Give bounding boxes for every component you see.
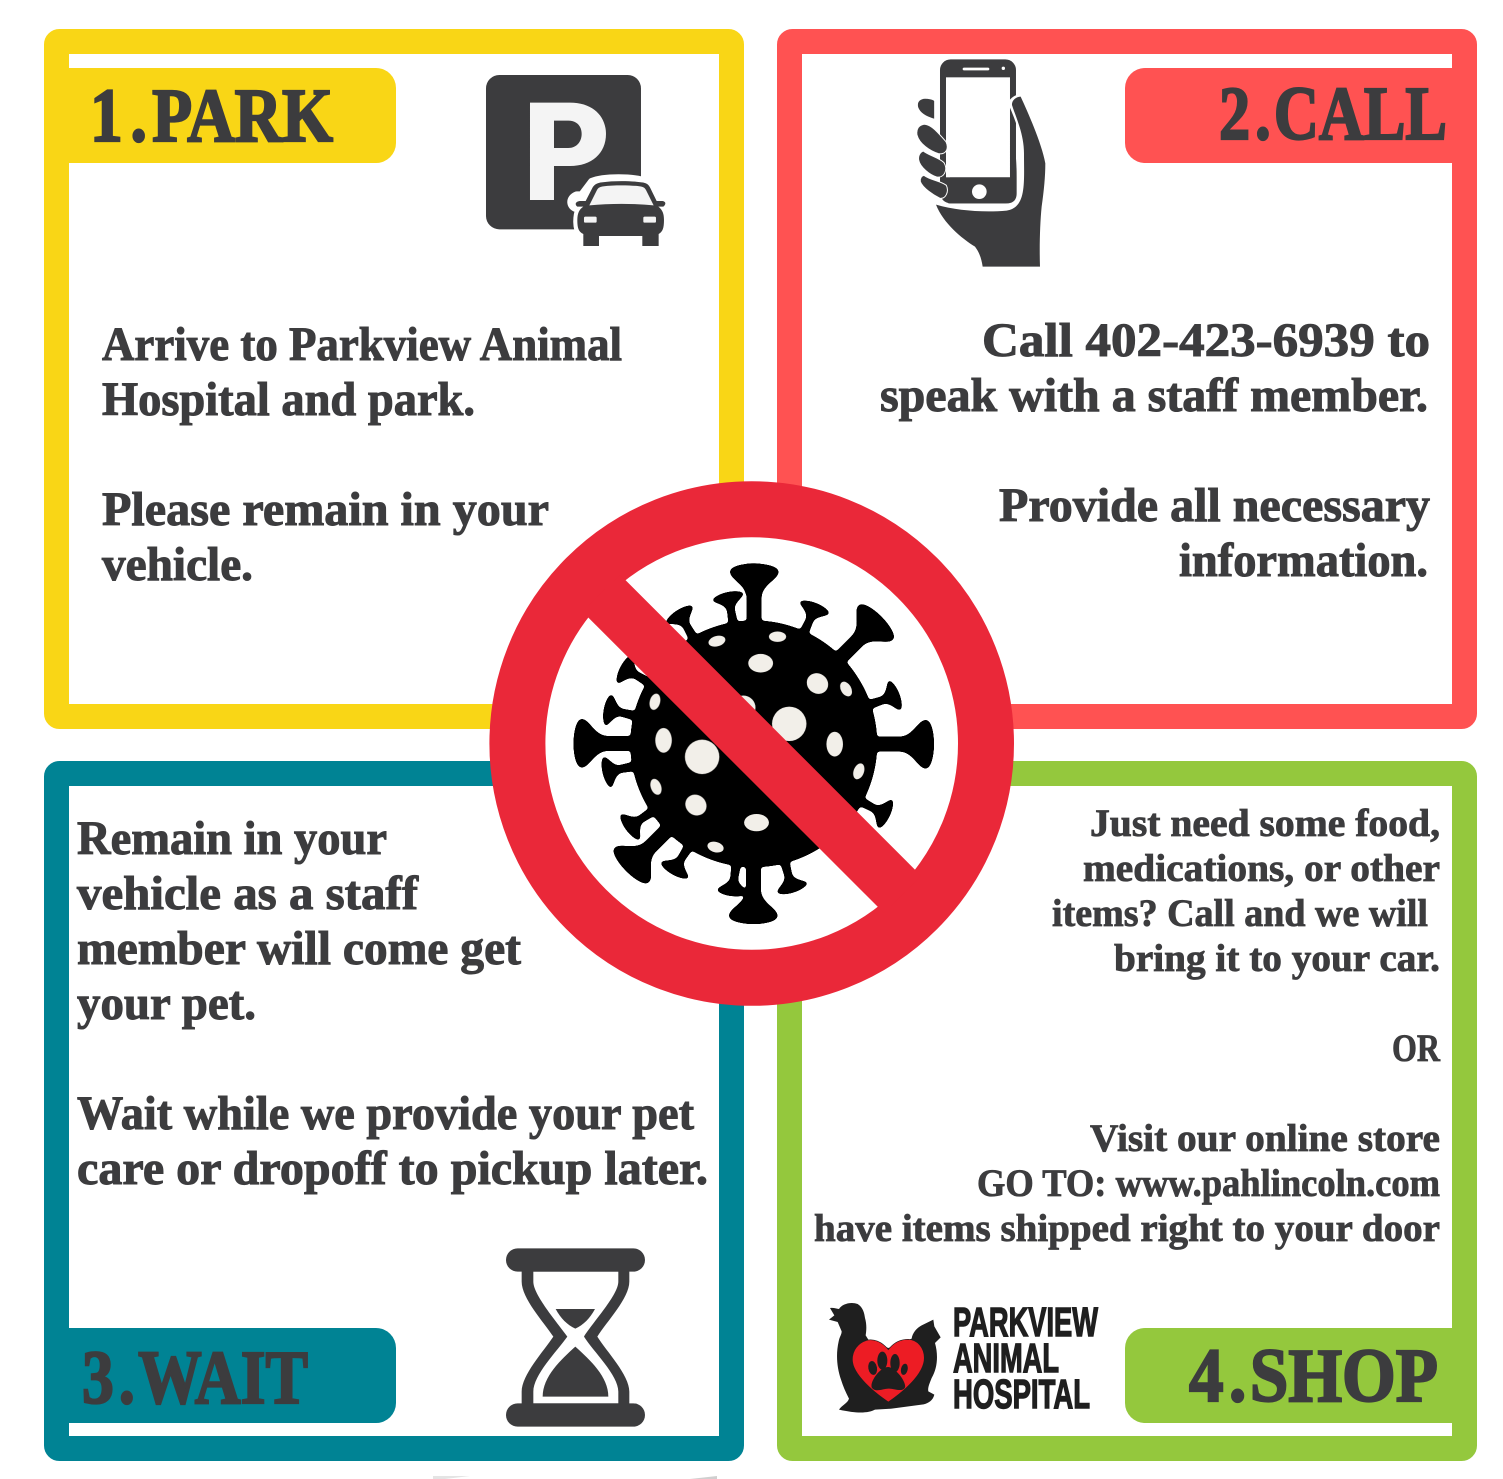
icon: no virus prohibition sign: [517, 509, 986, 978]
heading tab: 2.CALL: 2.CALL: [1219, 72, 1447, 156]
heading tab: 3.WAIT: 3.WAIT: [82, 1336, 308, 1420]
logo wordmark: [953, 1299, 1098, 1417]
fingers: [917, 98, 947, 198]
text: park instructions: Arrive to Parkview Animal: [102, 318, 622, 371]
logo wordmark: HOSPITAL: [953, 1371, 1090, 1417]
text: call instructions: Call 402-423-6939 to: [982, 314, 1430, 367]
virus spots: [648, 632, 866, 854]
text: park instructions: Please remain in your: [102, 483, 549, 536]
virus: [574, 564, 934, 924]
icon: parking sign with car: [486, 75, 666, 246]
text: park instructions: Hospital and park.: [102, 373, 475, 426]
logo wordmark: ANIMAL: [953, 1335, 1059, 1381]
text: shop instructions: items? Call and we will: [1052, 892, 1428, 935]
text: shop instructions: bring it to your car.: [1114, 937, 1440, 980]
panel: 2 call: [790, 42, 1464, 716]
virus silhouette: [574, 564, 934, 924]
heading tab: 4.SHOP: 4.SHOP: [1189, 1334, 1438, 1418]
text: call instructions: information.: [1179, 534, 1428, 587]
logo: Parkview Animal Hospital: [829, 1299, 1098, 1417]
logo wordmark: PARKVIEW: [953, 1299, 1098, 1345]
text: wait instructions: Wait while we provide your pet: [77, 1087, 694, 1140]
text: park instructions: [102, 318, 622, 591]
heading tab: 1.PARK: 1.PARK: [90, 74, 333, 158]
panel: 3 wait: [56, 774, 732, 1448]
heading tab: 2.CALL: [1125, 68, 1452, 163]
panel: 1 park: [56, 42, 732, 716]
text: shop instructions: GO TO: www.pahlincoln.com: [977, 1162, 1440, 1205]
text: shop instructions: Visit our online store: [1090, 1117, 1440, 1160]
prohibition bar: [582, 575, 921, 913]
heading tab: 3.WAIT: [69, 1328, 396, 1423]
text: shop instructions: [814, 802, 1441, 1250]
prohibition ring: [517, 509, 986, 978]
logo icon: dog, cat and paw heart: [829, 1303, 941, 1413]
text: shop instructions: OR: [1392, 1027, 1441, 1070]
bottom edge artifact: [433, 1476, 717, 1479]
text: call instructions: Provide all necessary: [999, 479, 1430, 532]
icon: hand holding phone: [917, 59, 1045, 267]
icon: hourglass: [506, 1248, 645, 1427]
text: wait instructions: member will come get: [77, 922, 521, 975]
text: shop instructions: Just need some food,: [1090, 802, 1440, 845]
text: wait instructions: [77, 812, 708, 1195]
text: wait instructions: care or dropoff to pickup later.: [77, 1142, 708, 1195]
text: wait instructions: your pet.: [77, 977, 256, 1030]
text: park instructions: vehicle.: [102, 538, 253, 591]
text: shop instructions: medications, or other: [1083, 847, 1440, 890]
text: wait instructions: Remain in your: [77, 812, 387, 865]
text: call instructions: speak with a staff member.: [880, 369, 1428, 422]
panel: 4 shop: [790, 774, 1464, 1448]
text: call instructions: [880, 314, 1430, 587]
text: wait instructions: vehicle as a staff: [77, 867, 419, 920]
text: shop instructions: have items shipped right to your door: [814, 1207, 1440, 1250]
